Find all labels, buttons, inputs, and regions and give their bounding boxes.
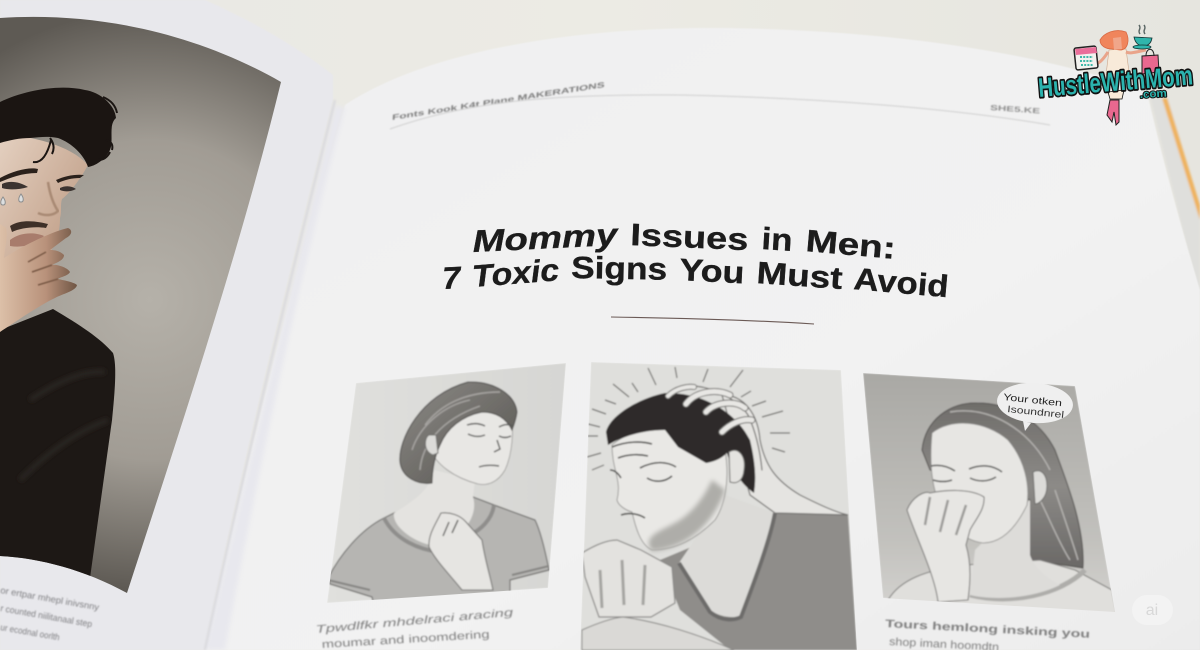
badge: ai watermark <box>1132 595 1173 625</box>
man's hair <box>0 88 116 167</box>
title <box>442 217 950 304</box>
panel: sketch of stressed man holding head <box>580 362 857 650</box>
title divider <box>611 317 814 324</box>
woman's hair <box>400 382 517 483</box>
title: Issues <box>630 217 749 257</box>
panel: sketch of woman with short hair <box>327 363 566 610</box>
running header <box>390 80 1050 129</box>
caption under panel 1 <box>315 607 515 650</box>
speech bubble <box>996 380 1074 431</box>
man's shirt <box>0 309 115 578</box>
woman's face <box>931 423 1028 543</box>
caption under panel 1: Tpwdlfkr mhdelraci aracing <box>315 607 515 636</box>
logo: HustleWithMom: .com <box>1140 88 1167 101</box>
left page caption <box>0 585 100 642</box>
title: You <box>679 252 745 290</box>
speech bubble: Isoundnrel <box>1007 404 1065 421</box>
logo shopping bag <box>1142 49 1159 74</box>
man's ear <box>729 450 744 483</box>
man's hand over mouth <box>0 224 77 332</box>
left page edge <box>205 100 335 650</box>
left page caption: or ertpar mhepl inivsnny <box>0 585 100 612</box>
logo woman's body <box>1106 49 1129 75</box>
title: Men: <box>804 223 897 266</box>
man's face <box>612 429 727 550</box>
running header: Fonts Kook K4t Plane MAKERATIONS <box>392 80 605 122</box>
logo woman's hair <box>1100 31 1128 50</box>
woman's hand at throat <box>429 513 493 590</box>
panel: sketch of woman covering mouth <box>863 373 1118 620</box>
man's clasped hands <box>582 540 675 617</box>
man's raised arm <box>722 395 848 515</box>
logo woman's legs <box>1107 100 1119 125</box>
woman's long hair <box>922 403 1083 568</box>
mouth and moustache <box>10 221 48 232</box>
title: Avoid <box>852 261 950 304</box>
woman's neck <box>394 470 475 545</box>
man's neck and face <box>0 138 88 258</box>
man's fingers in hair <box>668 386 762 470</box>
page gutter shadow <box>205 105 345 650</box>
woman's shoulders and shirt <box>888 559 1115 612</box>
logo woman's skirt <box>1108 90 1124 99</box>
woman's neck <box>970 500 1060 598</box>
woman's shirt <box>328 497 549 610</box>
title: Toxic <box>471 252 560 294</box>
right page <box>205 28 1200 650</box>
right page number: SHE5.KE <box>990 103 1040 115</box>
logo coffee cup <box>1133 25 1152 49</box>
speech bubble: Your otken <box>1003 392 1063 409</box>
badge: ai watermark: ai <box>1146 602 1158 619</box>
woman's brows and eyes <box>931 465 1002 482</box>
man's neck and v-neck <box>679 512 774 618</box>
orange pencil <box>1150 96 1200 300</box>
man's hair <box>606 393 755 493</box>
title: Must <box>756 255 844 296</box>
caption under panel 3 <box>885 618 1090 650</box>
caption under panel 3: Tours hemlong insking you <box>885 618 1090 641</box>
man's eyes and brows <box>0 168 84 215</box>
man's shirt <box>660 512 857 650</box>
title: Signs <box>571 250 667 287</box>
panel: portrait photo of distressed man <box>0 16 281 593</box>
man's curls <box>33 97 117 162</box>
title: Mommy <box>472 217 620 259</box>
stress lines <box>585 367 790 470</box>
left page caption: ur ecodnal oorlth <box>0 622 60 642</box>
woman's hand over mouth <box>907 490 984 602</box>
logo: HustleWithMom <box>1037 25 1194 125</box>
logo calendar <box>1074 46 1098 70</box>
title: in <box>761 221 794 258</box>
tears <box>1 194 23 205</box>
left page caption: r counted niilitanaal step <box>0 603 93 629</box>
man's features <box>610 442 676 518</box>
woman's features <box>467 424 513 467</box>
title: 7 <box>442 260 463 296</box>
woman's face <box>435 412 514 486</box>
left page <box>0 0 335 650</box>
man's stubble <box>649 480 725 551</box>
